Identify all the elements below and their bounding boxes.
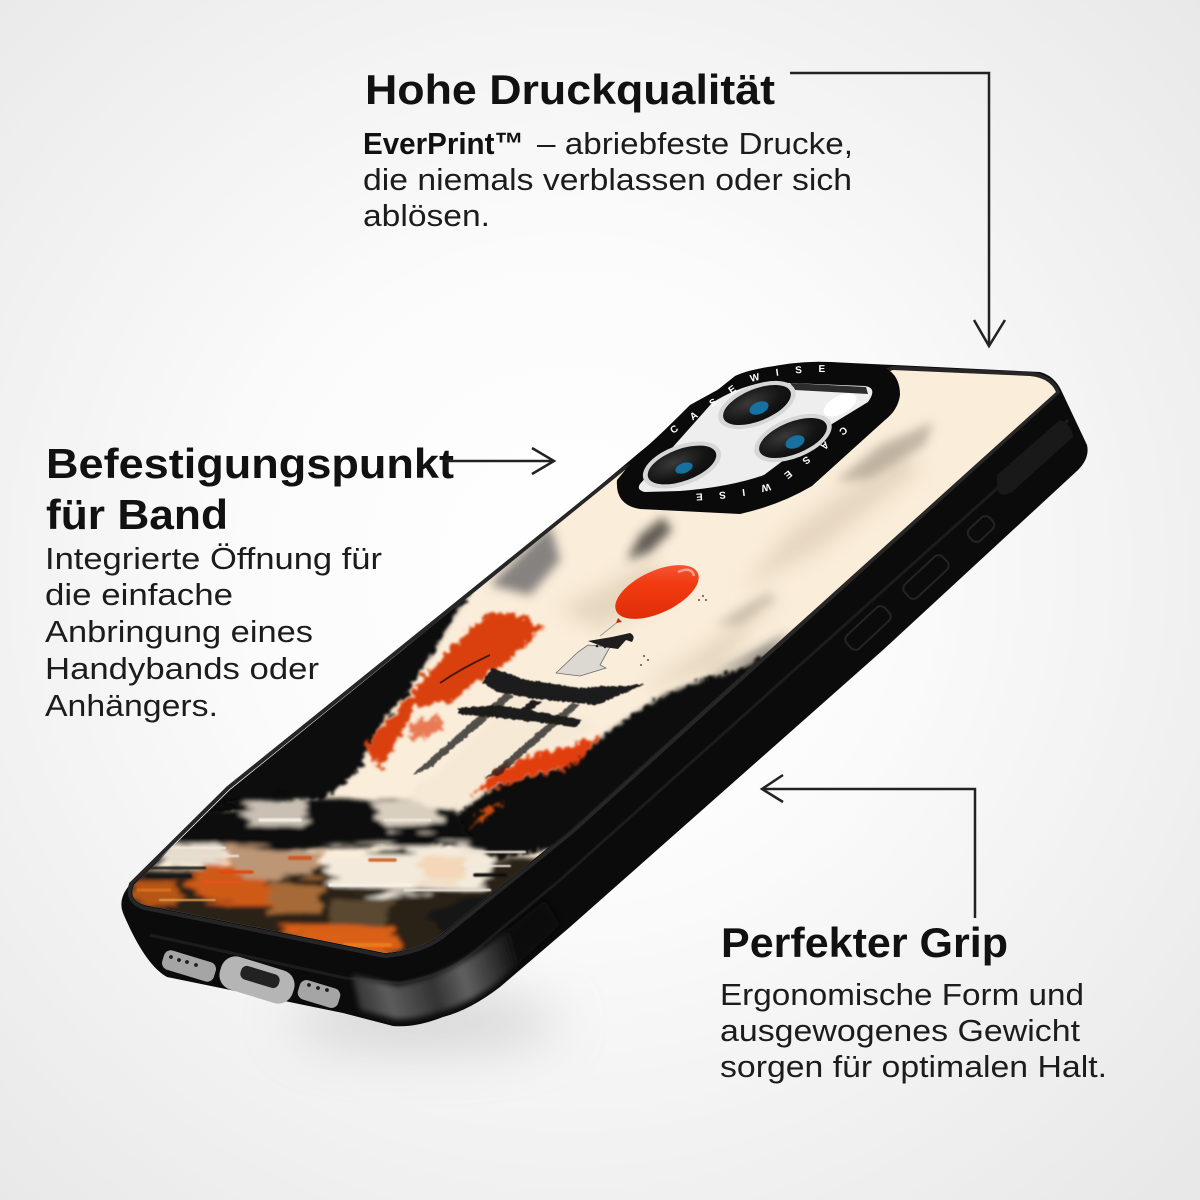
brand text ring [670,365,847,500]
case body [121,362,1088,1026]
arrow: lanyard point [445,448,554,474]
flash [820,389,860,421]
text block: Befestigungspunkt für Band [45,440,454,723]
brand text ring: CASEWISE [696,428,847,500]
side ridge [150,420,1068,983]
artwork: dark soft underlay [148,592,768,872]
description: ausgewogenes Gewicht [720,1013,1080,1048]
description: Ergonomische Form und [720,977,1084,1012]
side buttons [843,514,997,652]
bezel rim [130,368,1058,956]
artwork: ghost with witch hat [556,620,634,676]
heading: Hohe Druckqualität [365,66,775,113]
description: sorgen für optimalen Halt. [720,1049,1107,1084]
description: die niemals verblassen oder sich [363,162,852,197]
camera opening [639,382,872,492]
lens 3 [637,432,727,498]
description: die einfache [45,577,233,612]
camera island [616,362,900,514]
lens 1 [711,371,803,439]
artwork: orange foliage [365,612,600,828]
port: left speaker [160,949,218,983]
description: EverPrint™ [363,126,524,161]
inner shadow top [790,383,868,394]
artwork: horizontal streaks [138,820,525,945]
port: right speaker [296,978,342,1010]
description: – abriebfeste Drucke, [537,126,853,161]
phone case [121,362,1088,1026]
description: ablösen. [363,198,490,233]
text block: Perfekter Grip [720,919,1107,1084]
artwork: torii gate [412,668,645,778]
bottom corner highlight [352,900,560,1019]
arrow: print quality to case top [790,73,1005,346]
description: Anhängers. [45,688,218,723]
artwork: tree branch [440,655,490,683]
port: charging [216,953,298,1007]
camera ring [617,362,900,514]
side strap bulge [997,420,1073,495]
text block: Hohe Druckqualität [363,66,853,233]
artwork: lower brown base [132,794,538,953]
description [363,126,853,233]
artwork: grey smudges [490,422,933,680]
brand text ring: CASEWISE [670,365,825,433]
heading [46,440,454,538]
artwork: dark textured masses [198,594,762,862]
phone drop shadow [290,994,560,1050]
heading: Perfekter Grip [721,919,1008,966]
artwork: red balloon [615,565,699,623]
lens 2 [747,404,839,472]
description: Handybands oder [45,651,319,686]
heading: Befestigungspunkt [46,440,454,487]
artwork: paint specks [640,595,707,666]
description: Integrierte Öffnung für [45,541,382,576]
arrow: grip to case side [762,775,975,918]
printed artwork [100,360,1070,960]
description [45,541,382,723]
heading: für Band [46,491,228,538]
description: Anbringung eines [45,614,313,649]
artwork: pale glow under gate [412,782,502,814]
artwork: tan wash [560,450,920,690]
description [720,977,1107,1084]
